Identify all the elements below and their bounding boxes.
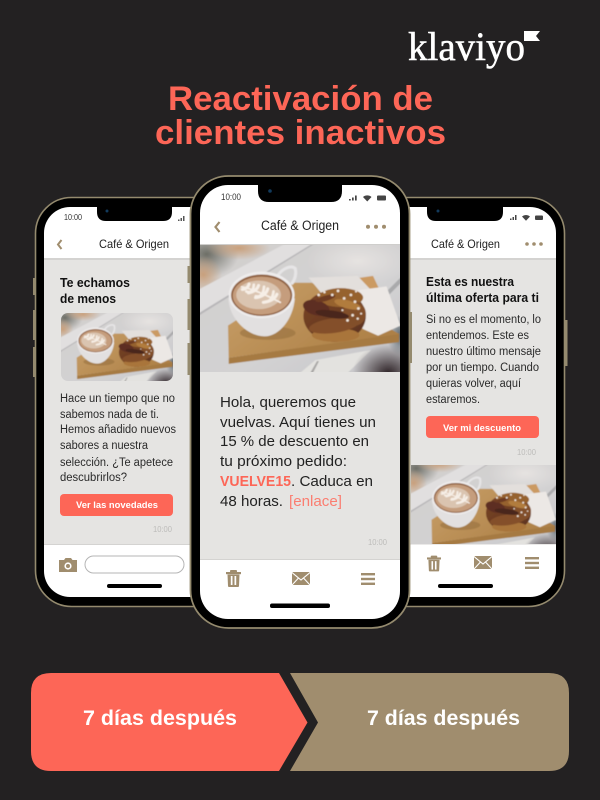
body text: sabores a nuestra: [60, 440, 149, 452]
timestamp: 10:00: [368, 537, 387, 547]
body text: [enlace]: [289, 493, 342, 510]
title: [155, 80, 446, 152]
status icons: [510, 215, 543, 221]
heading: última oferta para ti: [426, 291, 539, 305]
icon: trash: [226, 570, 241, 587]
phone: center: [174, 176, 424, 628]
body text: [220, 394, 376, 510]
sender name: Café & Origen: [99, 237, 169, 251]
phone: left: [33, 196, 194, 608]
status bar time: 10:00: [64, 212, 82, 222]
back chevron: [58, 240, 62, 249]
body text: por un tiempo. Cuando: [426, 362, 539, 374]
body text: quieras volver, aquí: [426, 378, 522, 390]
body text: Hola, queremos que: [220, 394, 356, 411]
logo: klaviyo: klaviyo: [408, 24, 525, 69]
body text: Hemos añadido nuevos: [60, 424, 176, 436]
heading: Esta es nuestra: [426, 275, 515, 289]
icon: envelope: [474, 556, 492, 569]
button: [60, 494, 173, 516]
back chevron: [216, 222, 220, 232]
body text: [426, 314, 541, 406]
title: clientes inactivos: [155, 114, 446, 152]
timestamp: 10:00: [153, 525, 173, 534]
body text: entendemos. Este es: [426, 330, 529, 342]
body text: vuelvas. Aquí tienes un: [220, 414, 376, 431]
heading: [60, 276, 130, 306]
step: first delay: [31, 673, 308, 771]
body text: nuestro último mensaje: [426, 346, 541, 358]
timestamp: 10:00: [517, 448, 537, 457]
step: second delay: 7 días después: [367, 707, 520, 730]
timeline banner: [31, 673, 569, 771]
icon: menu: [361, 573, 375, 585]
button: Ver las novedades: [76, 500, 158, 511]
body text: tu próximo pedido:: [220, 453, 347, 470]
photo: [411, 465, 556, 544]
title: Reactivación de: [168, 80, 433, 118]
heading: [426, 275, 539, 305]
status bar time: 10:00: [221, 192, 241, 203]
body text: . Caduca en: [291, 473, 373, 490]
body text: [60, 393, 176, 484]
icon: camera: [59, 558, 77, 572]
home bar: [438, 584, 493, 588]
body text: descubrirlos?: [60, 472, 127, 484]
heading: de menos: [60, 292, 116, 306]
body text: selección. ¿Te apetece: [60, 457, 173, 469]
icon: menu: [525, 557, 539, 569]
step: second delay: [290, 673, 569, 771]
menu dots: [525, 242, 543, 246]
step: first delay: 7 días después: [83, 707, 237, 730]
body text: sabemos nada de ti.: [60, 409, 159, 421]
icon: envelope: [292, 572, 310, 585]
phone: right: [406, 196, 568, 608]
body text: estaremos.: [426, 394, 480, 406]
body text: VUELVE15: [220, 473, 292, 490]
button: [426, 416, 539, 438]
input field: [85, 556, 184, 573]
sender name: Café & Origen: [261, 218, 339, 233]
menu dots: [366, 225, 386, 229]
body text: Si no es el momento, lo: [426, 314, 541, 326]
hero photo: [200, 245, 400, 372]
button: Ver mi descuento: [443, 423, 521, 434]
body text: Hace un tiempo que no: [60, 393, 175, 405]
photo: [61, 313, 173, 381]
sender name: Café & Origen: [431, 237, 500, 251]
heading: Te echamos: [60, 276, 130, 290]
home bar: [270, 604, 330, 608]
icon: trash: [427, 556, 441, 571]
body text: 48 horas.: [220, 493, 283, 510]
home bar: [107, 584, 162, 588]
body text: 15 % de descuento en: [220, 433, 369, 450]
status icons: [349, 195, 386, 202]
